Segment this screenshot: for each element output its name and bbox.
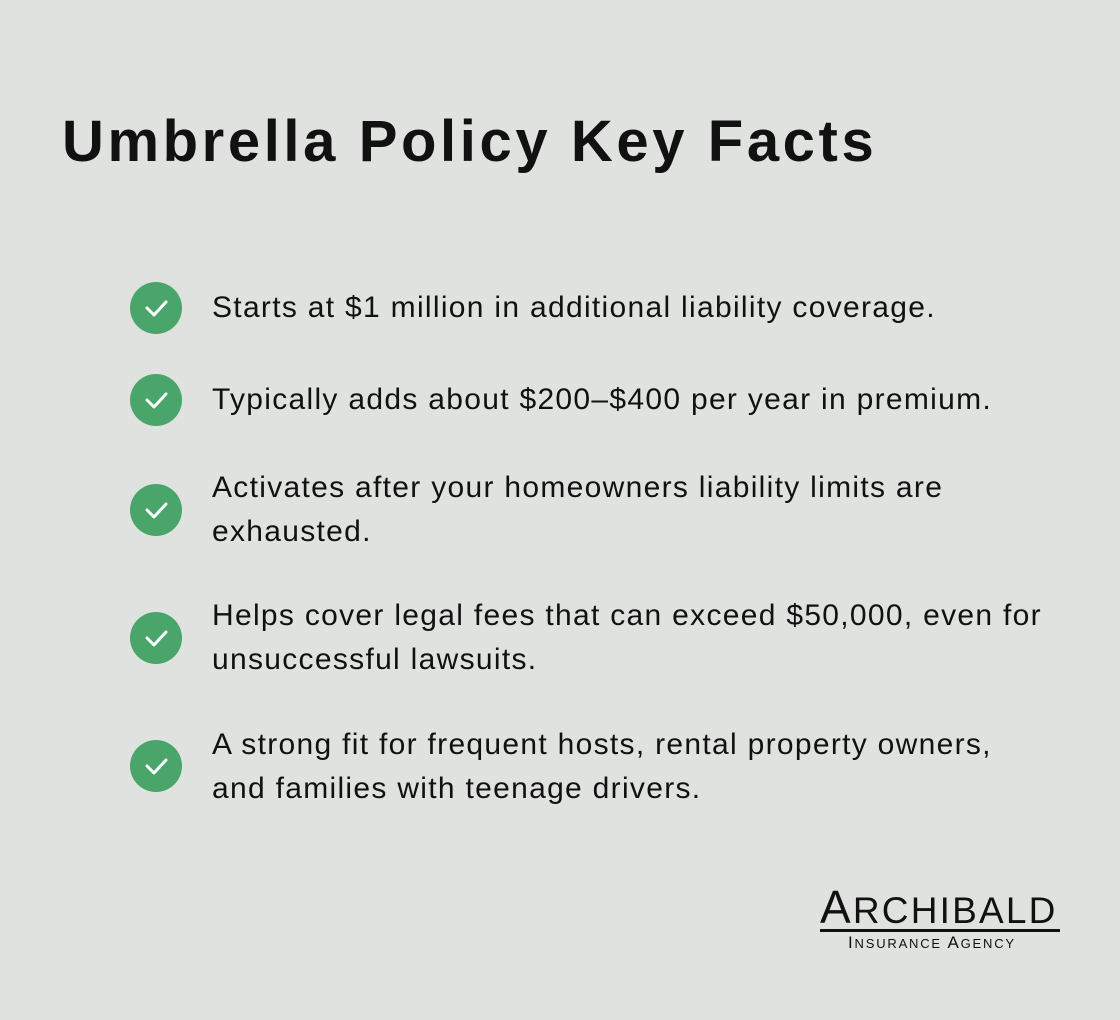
text bbox=[212, 599, 1042, 676]
text: Helps cover legal fees that can exceed $50,000, even for bbox=[212, 599, 1042, 632]
item 1 bbox=[130, 282, 936, 334]
text: and families with teenage drivers. bbox=[212, 772, 701, 805]
text bbox=[212, 728, 992, 805]
title: Umbrella Policy Key Facts bbox=[62, 109, 877, 174]
icon: check bbox=[130, 484, 182, 536]
item 3 bbox=[130, 471, 943, 548]
item 5 bbox=[130, 728, 992, 805]
text: A strong fit for frequent hosts, rental property owners, bbox=[212, 728, 992, 761]
text: exhausted. bbox=[212, 515, 372, 548]
text: Typically adds about $200–$400 per year in premium. bbox=[212, 383, 992, 416]
text: unsuccessful lawsuits. bbox=[212, 643, 537, 676]
icon: check bbox=[130, 612, 182, 664]
logo: ARCHIBALD bbox=[820, 881, 1058, 933]
logo: INSURANCE AGENCY bbox=[848, 933, 1016, 952]
icon: check bbox=[130, 282, 182, 334]
icon: check bbox=[130, 374, 182, 426]
text: Activates after your homeowners liability limits are bbox=[212, 471, 943, 504]
item 2 bbox=[130, 374, 992, 426]
text: Starts at $1 million in additional liability coverage. bbox=[212, 291, 936, 324]
icon: check bbox=[130, 740, 182, 792]
text bbox=[212, 471, 943, 548]
item 4 bbox=[130, 599, 1042, 676]
